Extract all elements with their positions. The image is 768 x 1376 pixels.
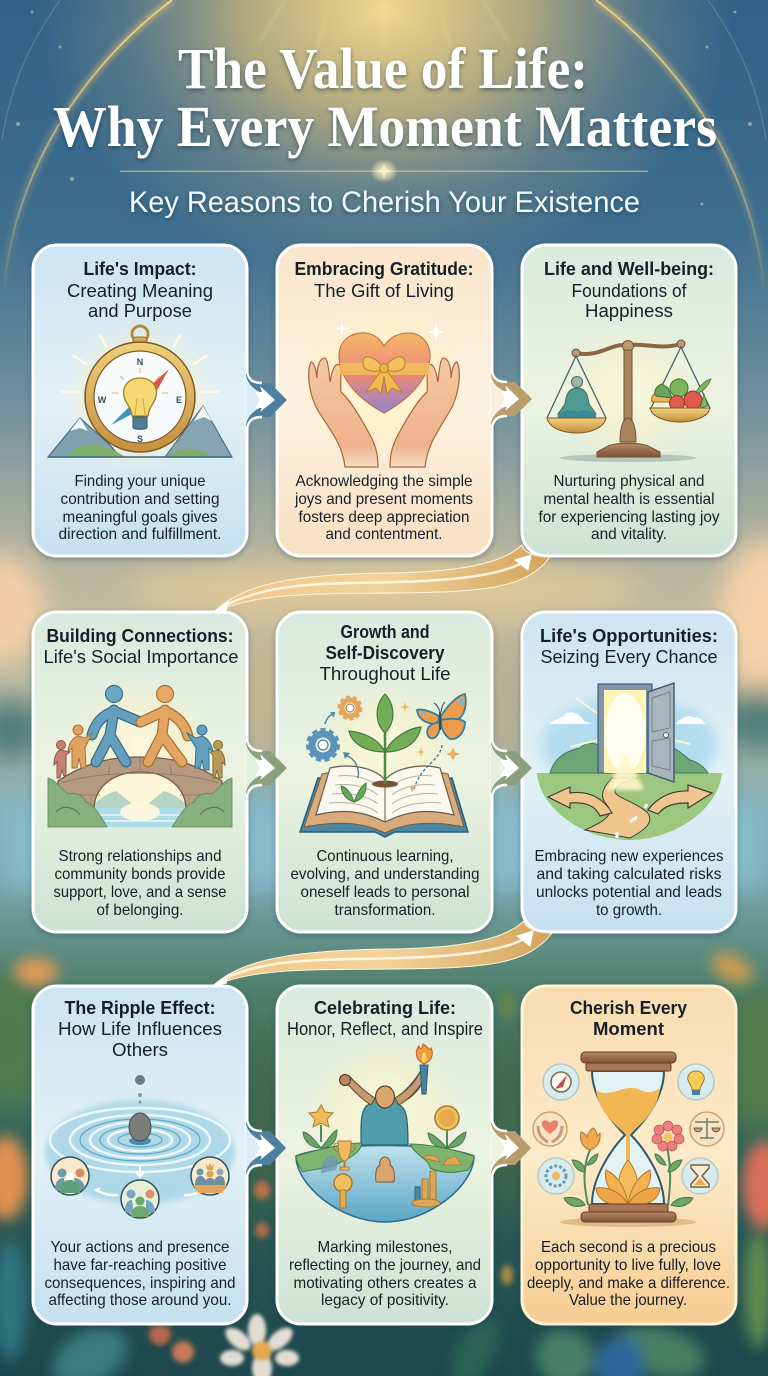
heading: building connections: Building Connections: (46, 625, 234, 646)
curved gold connector: opportunities to ripple effect (213, 921, 552, 986)
body text: growth and self-discovery: Continuous learning, (316, 848, 454, 865)
body text: celebrating life: motivating others creates a (294, 1275, 477, 1292)
arrow: celebrating life to cherish every moment (491, 1120, 531, 1176)
body text: life and well-being: and vitality. (591, 526, 667, 543)
heading: celebrating life: Honor, Reflect, and Inspire (287, 1018, 483, 1039)
heading: life's impact (67, 258, 213, 321)
heading: life's opportunities: Life's Opportunities: (540, 625, 718, 646)
heading: embracing gratitude: The Gift of Living (314, 280, 454, 301)
icon: orange gear (339, 697, 361, 719)
heading: growth and self-discovery: Self-Discovery (326, 642, 445, 663)
panel: life and well-being (522, 245, 736, 556)
body text: life's opportunities: unlocks potential and leads (536, 884, 722, 901)
heading: life's impact: and Purpose (88, 300, 192, 321)
body text: celebrating life: Marking milestones, (318, 1239, 452, 1256)
heading: celebrating life (287, 997, 483, 1039)
icon: mini hourglass (682, 1158, 718, 1194)
icon: mini heart in hands (533, 1112, 567, 1146)
icon: open book with sprouting plant, gears and butterfly (300, 680, 468, 837)
heading: the ripple effect: Others (112, 1039, 168, 1060)
body text: building connections: support, love, and a sense (54, 884, 226, 901)
body text: the ripple effect: Your actions and presence (50, 1239, 230, 1256)
icon: stone making ripples reaching people (45, 1075, 235, 1218)
heading: life and well-being: Foundations of (572, 280, 687, 301)
panel: celebrating life (277, 986, 492, 1324)
icon: rising bars (412, 1171, 440, 1207)
body text: the ripple effect: have far-reaching positive (54, 1257, 226, 1274)
icon: person raising torch above a milestone landscape (296, 1030, 474, 1222)
panel: building connections (33, 612, 247, 932)
body text: building connections: community bonds provide (54, 866, 226, 883)
panel: cherish every moment (522, 986, 736, 1324)
body text: building connections (54, 848, 226, 919)
figure: orange adult (141, 710, 188, 762)
icon: star flower (303, 1105, 337, 1148)
body text: life's impact: meaningful goals gives (62, 509, 218, 526)
heading: growth and self-discovery: Throughout Life (320, 663, 450, 684)
icon: family circle left (51, 1157, 89, 1195)
icon: blue gear (308, 730, 338, 760)
figure: blue adult (92, 710, 140, 762)
title (53, 36, 717, 159)
body text: the ripple effect: consequences, inspiring and (44, 1275, 236, 1292)
title divider with sparkle (120, 159, 648, 183)
body text: embracing gratitude: fosters deep appreciation (298, 509, 470, 526)
body text: celebrating life (289, 1239, 481, 1309)
heading: cherish every moment: Moment (593, 1018, 665, 1039)
body text: life's opportunities: Embracing new experiences (534, 848, 724, 865)
panel: growth and self-discovery (277, 612, 492, 932)
body text: celebrating life: legacy of positivity. (321, 1292, 449, 1309)
body text: embracing gratitude: Acknowledging the simple (296, 473, 472, 490)
icon: hourglass with lotus, flowers and small icons (533, 1052, 724, 1227)
panel: the ripple effect (33, 986, 247, 1324)
arrow: impact to gratitude (246, 372, 287, 428)
heading: cherish every moment (570, 997, 688, 1039)
heading: growth and self-discovery: Growth and (340, 621, 430, 642)
body text: growth and self-discovery: transformation. (334, 902, 436, 919)
heading: building connections: Life's Social Importance (44, 646, 238, 667)
body text: cherish every moment: Value the journey. (569, 1292, 687, 1309)
body text: the ripple effect: affecting those around you. (48, 1292, 232, 1309)
icon: mini lightbulb (678, 1064, 714, 1100)
body text: life and well-being: for experiencing lasting joy (538, 509, 720, 526)
curved gold connector: well-being to connections (213, 545, 550, 613)
body text: embracing gratitude: and contentment. (326, 526, 442, 543)
body text: the ripple effect (44, 1239, 236, 1309)
heading: life's impact: Life's Impact: (84, 258, 196, 279)
arrow: gratitude to well-being (491, 372, 532, 427)
panel: life's impact (33, 245, 247, 556)
icon: family circle centre (121, 1180, 159, 1218)
body text: building connections: of belonging. (96, 902, 184, 919)
arrow: connections to growth (246, 740, 287, 796)
body text: cherish every moment: Each second is a precious (541, 1239, 716, 1256)
icon: compass with lightbulb and mountains: N (137, 357, 143, 367)
heading: embracing gratitude: Embracing Gratitude: (294, 258, 474, 279)
icon: group at table circle right (191, 1157, 229, 1195)
arrow: growth to opportunities (491, 740, 532, 796)
body text: growth and self-discovery: evolving, and understanding (290, 866, 480, 883)
background flower (220, 1314, 299, 1376)
icon: open door and forking path (537, 683, 722, 840)
icon: pink flower (652, 1121, 693, 1207)
heading: cherish every moment: Cherish Every (570, 997, 688, 1018)
body text: celebrating life: reflecting on the journey, and (289, 1257, 481, 1274)
heading: the ripple effect: The Ripple Effect: (64, 997, 216, 1018)
panel: embracing gratitude (277, 245, 492, 556)
icon: balance scale with meditator and fruit (547, 323, 711, 467)
icon: mini flower wreath (538, 1158, 574, 1194)
body text: life's impact: direction and fulfillment. (58, 526, 222, 543)
icon: compass with lightbulb and mountains (48, 321, 232, 473)
icon: compass with lightbulb and mountains: W (98, 395, 107, 405)
icon: tulip (564, 1128, 600, 1207)
body text: life and well-being: mental health is essential (544, 491, 714, 508)
body text: embracing gratitude: joys and present moments (294, 491, 473, 508)
icon: medal in water (334, 1174, 352, 1208)
body text: growth and self-discovery: oneself leads to personal (300, 884, 470, 901)
body text: life's opportunities (534, 848, 724, 919)
heading: life and well-being: Life and Well-being: (544, 258, 714, 279)
icon: butterfly (417, 694, 466, 739)
icon: compass with lightbulb and mountains: E (176, 395, 182, 405)
icon: trophy (334, 1141, 355, 1170)
heading: celebrating life: Celebrating Life: (314, 997, 456, 1018)
heading: the ripple effect: How Life Influences (58, 1018, 222, 1039)
heading: life and well-being: Happiness (585, 300, 673, 321)
body text: life's opportunities: to growth. (596, 902, 662, 919)
title: The Value of Life: (178, 36, 588, 101)
body text: life's opportunities: and taking calculated risks (536, 866, 722, 883)
heading: life's impact: Creating Meaning (67, 280, 213, 301)
icon: hands holding a gift heart (299, 295, 469, 467)
body text: life's impact: contribution and setting (60, 491, 220, 508)
icon: coin flower (428, 1106, 466, 1148)
arrow: ripple effect to celebrating life (246, 1120, 286, 1176)
heading: life's opportunities (540, 625, 718, 667)
decorative golden arcs and light rays (2, 0, 766, 290)
heading: life and well-being (544, 258, 714, 321)
icon: compass with lightbulb and mountains: S (137, 434, 143, 444)
body text: building connections: Strong relationships and (58, 848, 222, 865)
body text: cherish every moment: opportunity to live fully, love (535, 1257, 721, 1274)
icon: people joining hands on a stone bridge (48, 673, 232, 827)
heading: building connections (44, 625, 238, 667)
heading: growth and self-discovery (320, 621, 450, 684)
body text: life and well-being: Nurturing physical and (554, 473, 704, 490)
icon: mini compass (543, 1064, 579, 1100)
body text: life's impact (58, 473, 222, 543)
heading: the ripple effect (58, 997, 222, 1060)
body text: cherish every moment: deeply, and make a difference. (527, 1275, 730, 1292)
body text: life's impact: Finding your unique (74, 473, 206, 490)
subtitle: Key Reasons to Cherish Your Existence (129, 186, 640, 219)
icon: mini scale (690, 1112, 724, 1146)
body text: embracing gratitude (294, 473, 473, 543)
body text: growth and self-discovery (290, 848, 480, 919)
body text: cherish every moment (527, 1239, 730, 1309)
body text: life and well-being (538, 473, 720, 543)
panel: life's opportunities (522, 612, 736, 932)
heading: embracing gratitude (294, 258, 474, 301)
title: Why Every Moment Matters (53, 94, 717, 159)
heading: life's opportunities: Seizing Every Chance (540, 646, 718, 667)
